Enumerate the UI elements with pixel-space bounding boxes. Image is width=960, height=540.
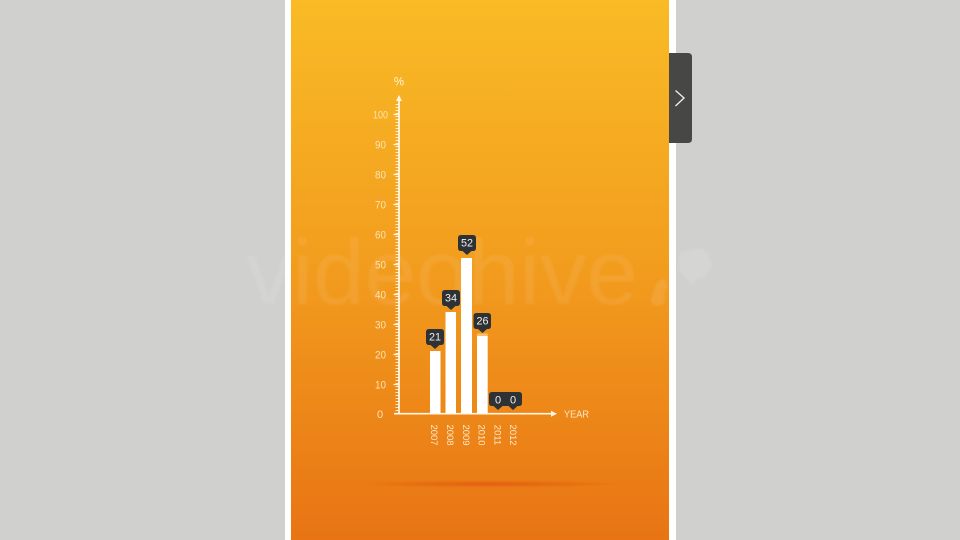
y axis arrow (396, 95, 402, 101)
white card frame (285, 0, 676, 540)
y axis labels (373, 110, 388, 421)
y axis labels: 100 (373, 110, 388, 122)
y axis labels: 50 (375, 260, 386, 272)
y axis labels: 20 (375, 350, 386, 362)
watermark: videohive (246, 222, 638, 324)
year labels: 2010 (476, 424, 486, 446)
y axis labels: 80 (375, 170, 386, 182)
y axis labels: 40 (375, 290, 386, 302)
value tags 0 and 0: 0 (495, 394, 501, 406)
value tag 26 (474, 313, 491, 333)
x axis (394, 413, 553, 415)
year labels: 2012 (507, 424, 518, 446)
value tag 52 (458, 235, 476, 255)
x axis title: YEAR (564, 408, 589, 420)
value tags 0 and 0 (489, 392, 522, 410)
bars (430, 258, 488, 413)
floor shadow (355, 480, 625, 488)
y axis (394, 100, 399, 414)
y axis labels: 60 (375, 230, 386, 242)
y axis labels: 30 (375, 320, 386, 332)
side tab with chevron (669, 53, 692, 143)
year labels (428, 424, 518, 446)
orange panel (291, 0, 669, 540)
y axis labels: 90 (375, 140, 386, 152)
value tag 34 (442, 290, 460, 310)
value tag 34: 34 (445, 292, 457, 304)
y axis labels: 0 (377, 409, 383, 421)
year labels: 2009 (460, 424, 471, 446)
x axis arrow (551, 411, 557, 417)
value tag 52: 52 (461, 238, 473, 250)
y axis labels: 70 (375, 200, 386, 212)
watermark logo (651, 248, 711, 306)
value tag 21 (426, 329, 444, 349)
y axis labels: 10 (375, 380, 386, 392)
year labels: 2007 (428, 424, 439, 446)
year labels: 2011 (492, 425, 502, 445)
year labels: 2008 (444, 424, 455, 446)
value tags 0 and 0: 0 (510, 394, 516, 406)
bar chart (373, 76, 589, 446)
value tag 26: 26 (476, 316, 488, 328)
value tag 21: 21 (429, 332, 441, 344)
y axis unit: % (394, 76, 404, 88)
